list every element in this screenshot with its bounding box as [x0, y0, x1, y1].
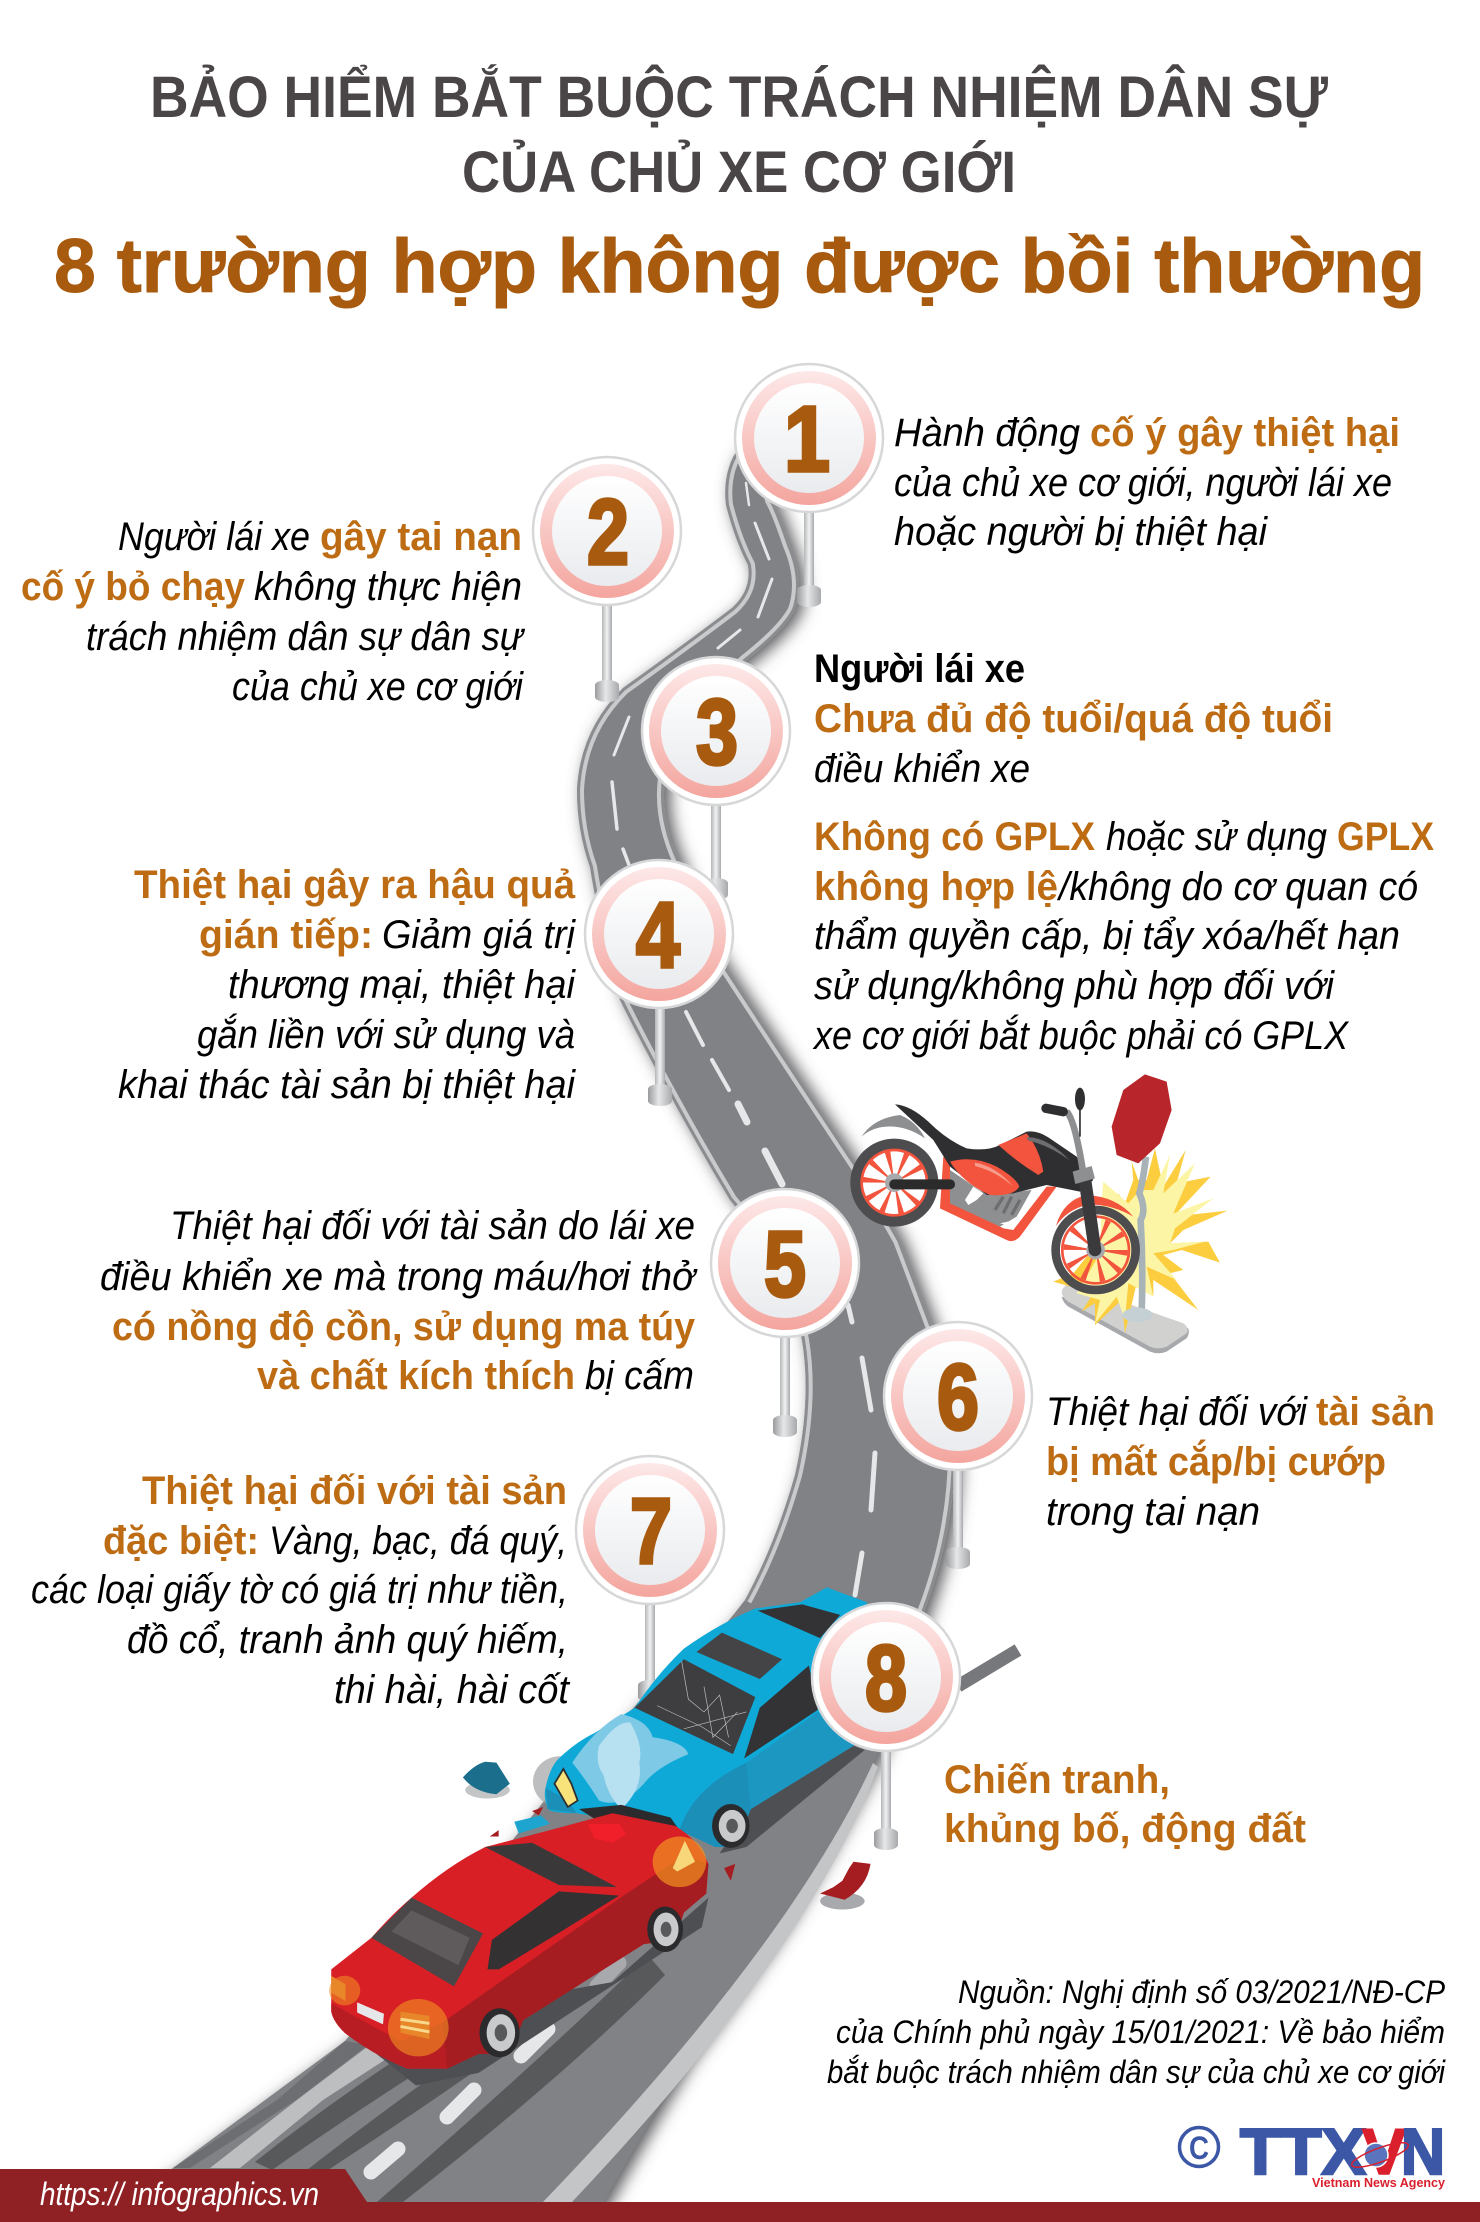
road edge stripes — [577, 453, 953, 1612]
rear fender — [862, 1115, 925, 1138]
text block 4 — [118, 863, 576, 1107]
sign 6: 6 — [937, 1345, 979, 1449]
text block 1: cố ý gây thiệt hại — [1090, 411, 1400, 455]
text block 3: Chưa đủ độ tuổi/quá độ tuổi — [814, 697, 1333, 741]
text block 3: không hợp lệ — [814, 865, 1058, 909]
text block 5: và chất kích thích — [257, 1354, 575, 1398]
text block 8: Chiến tranh, — [944, 1758, 1170, 1802]
road — [100, 446, 1018, 2222]
blue debris — [463, 1762, 550, 1834]
text block 2: Người lái xe — [118, 515, 310, 559]
sign 7 — [576, 1456, 724, 1702]
text block 1: hoặc người bị thiệt hại — [894, 510, 1268, 554]
distant road strip — [958, 1650, 1018, 1686]
blue car side window — [744, 1666, 818, 1758]
text block 3: Không có GPLX — [814, 815, 1095, 859]
footer url: https:// infographics.vn — [40, 2176, 319, 2212]
text block 3: thẩm quyền cấp, bị tẩy xóa/hết hạn — [814, 914, 1400, 958]
text block 3: sử dụng/không phù hợp đối với — [814, 964, 1335, 1008]
text block 3: /không do cơ quan có — [1056, 865, 1418, 909]
sign 4 — [585, 860, 733, 1106]
text block 2: trách nhiệm dân sự dân sự — [86, 615, 525, 659]
text block 6: bị mất cắp/bị cướp — [1046, 1438, 1386, 1484]
footer bar — [0, 2169, 1480, 2222]
blue car shadow — [720, 1746, 865, 1853]
stop sign — [1112, 1074, 1172, 1163]
logo TTXVN: V — [1362, 2115, 1406, 2188]
blue car grille crumple — [579, 1805, 679, 1830]
text block 7: thi hài, hài cốt — [334, 1668, 571, 1712]
text block 3 — [812, 647, 1434, 1058]
engine — [950, 1170, 1032, 1227]
blue car wheel — [712, 1804, 750, 1848]
blue car rear window — [758, 1604, 840, 1638]
car crash illustration — [329, 1587, 880, 2086]
text block 6 — [1046, 1390, 1435, 1534]
mirror — [1075, 1088, 1085, 1110]
text block 6: trong tai nạn — [1046, 1490, 1260, 1534]
title — [54, 65, 1425, 309]
logo TTXVN: TTX — [1240, 2115, 1366, 2188]
text block 4: Giảm giá trị — [382, 913, 576, 957]
logo TTXVN — [1180, 2115, 1446, 2190]
text block 1: Hành động — [894, 411, 1080, 455]
text block 8 — [944, 1758, 1306, 1851]
front fender — [1056, 1195, 1133, 1226]
text block 1 — [894, 411, 1400, 554]
text block 1: của chủ xe cơ giới, người lái xe — [894, 461, 1392, 505]
red car plate — [357, 2002, 384, 2024]
text block 5: Thiệt hại đối với tài sản do lái xe — [170, 1204, 695, 1248]
copyright icon: C — [1189, 2130, 1209, 2166]
smoke puff — [533, 1756, 587, 1807]
fork and handlebar — [1085, 1180, 1095, 1250]
side panel — [950, 1159, 1019, 1195]
text block 3: GPLX — [1337, 815, 1434, 859]
text block 4: gián tiếp: — [199, 913, 373, 957]
text block 4: Thiệt hại gây ra hậu quả — [134, 863, 576, 907]
text block 6: tài sản — [1316, 1390, 1435, 1434]
red frame — [940, 1157, 1057, 1241]
sign 5: 5 — [764, 1212, 806, 1316]
text block 6: Thiệt hại đối với — [1046, 1390, 1308, 1434]
concrete base — [1062, 1283, 1189, 1353]
heading line 1: BẢO HIỂM BẮT BUỘC TRÁCH NHIỆM DÂN SỰ — [150, 65, 1329, 130]
blue car windshield — [635, 1659, 755, 1754]
seat and black body — [895, 1104, 1093, 1195]
text block 7: đồ cổ, tranh ảnh quý hiếm, — [127, 1618, 568, 1662]
sign 3: 3 — [696, 680, 738, 784]
red debris — [490, 1807, 870, 1909]
text block 4: khai thác tài sản bị thiệt hại — [118, 1063, 576, 1107]
copyright icon — [1180, 2128, 1218, 2166]
text block 4: gắn liền với sử dụng và — [197, 1012, 575, 1057]
sign 7: 7 — [630, 1479, 672, 1583]
text block 3: điều khiển xe — [814, 747, 1030, 791]
text block 5: điều khiển xe mà trong máu/hơi thở — [100, 1255, 698, 1299]
source note: của Chính phủ ngày 15/01/2021: Về bảo hiểm — [836, 2014, 1445, 2050]
text block 2: gây tai nạn — [320, 515, 522, 559]
explosion — [1053, 1148, 1228, 1333]
text block 3: hoặc sử dụng — [1106, 815, 1327, 859]
sign 5 — [711, 1189, 859, 1437]
sign 6 — [884, 1322, 1032, 1569]
lower road bands and skid marks — [173, 1763, 878, 2202]
sign 1 — [735, 364, 883, 607]
text block 7: Thiệt hại đối với tài sản — [142, 1469, 567, 1513]
blue car headlight — [554, 1769, 578, 1807]
sign 4: 4 — [636, 883, 680, 987]
swing arm — [894, 1169, 950, 1199]
blue car — [545, 1587, 880, 1848]
text block 2: không thực hiện — [254, 565, 522, 609]
red car tail light right — [388, 1999, 449, 2056]
road shadow — [106, 449, 961, 2222]
fuel tank — [998, 1133, 1043, 1175]
center dashes — [371, 483, 875, 2172]
text block 7: Vàng, bạc, đá quý, — [269, 1519, 567, 1563]
red car tail light left — [329, 1976, 360, 2005]
sign 2 — [533, 457, 681, 702]
logo TTXVN: N — [1401, 2115, 1445, 2188]
blue car sunroof — [696, 1633, 782, 1679]
text block 5: có nồng độ cồn, sử dụng ma túy — [112, 1305, 696, 1349]
front wheel — [1056, 1210, 1136, 1290]
red car front light glow — [653, 1836, 706, 1887]
red car shadow — [345, 1898, 708, 2086]
sign 2: 2 — [587, 480, 629, 584]
text block 3: xe cơ giới bắt buộc phải có GPLX — [812, 1013, 1349, 1058]
subtitle: 8 trường hợp không được bồi thường — [54, 224, 1425, 309]
red car side windows — [487, 1891, 619, 1969]
text block 8: khủng bố, động đất — [944, 1807, 1306, 1851]
text block 7: đặc biệt: — [103, 1519, 259, 1563]
logo TTXVN: Vietnam News Agency — [1312, 2175, 1446, 2190]
red car rear window — [371, 1898, 483, 1986]
source note: Nguồn: Nghị định số 03/2021/NĐ-CP — [958, 1974, 1446, 2010]
sign 8: 8 — [865, 1626, 907, 1730]
steam on the hood — [572, 1714, 688, 1803]
sign 1: 1 — [784, 387, 830, 491]
heading line 2: CỦA CHỦ XE CƠ GIỚI — [462, 140, 1016, 205]
sign 8 — [812, 1603, 960, 1850]
red car — [329, 1813, 708, 2069]
motorcycle crash illustration — [850, 1074, 1228, 1353]
red car front window strip — [485, 1843, 617, 1887]
text block 3: Người lái xe — [814, 647, 1025, 691]
text block 2 — [21, 515, 525, 709]
text block 2: cố ý bỏ chạy — [21, 565, 246, 609]
source note — [827, 1974, 1446, 2090]
rear wheel — [850, 1139, 938, 1227]
sign 3 — [642, 657, 790, 900]
text block 5: bị cấm — [585, 1354, 694, 1398]
text block 7: các loại giấy tờ có giá trị như tiền, — [31, 1568, 568, 1612]
text block 5 — [100, 1204, 698, 1398]
red car wheels — [479, 1907, 683, 2057]
text block 7 — [31, 1469, 571, 1712]
road surface — [100, 446, 955, 2222]
text block 4: thương mại, thiệt hại — [228, 963, 576, 1007]
text block 2: của chủ xe cơ giới — [232, 665, 524, 709]
bent stop sign pole — [1139, 1157, 1146, 1313]
